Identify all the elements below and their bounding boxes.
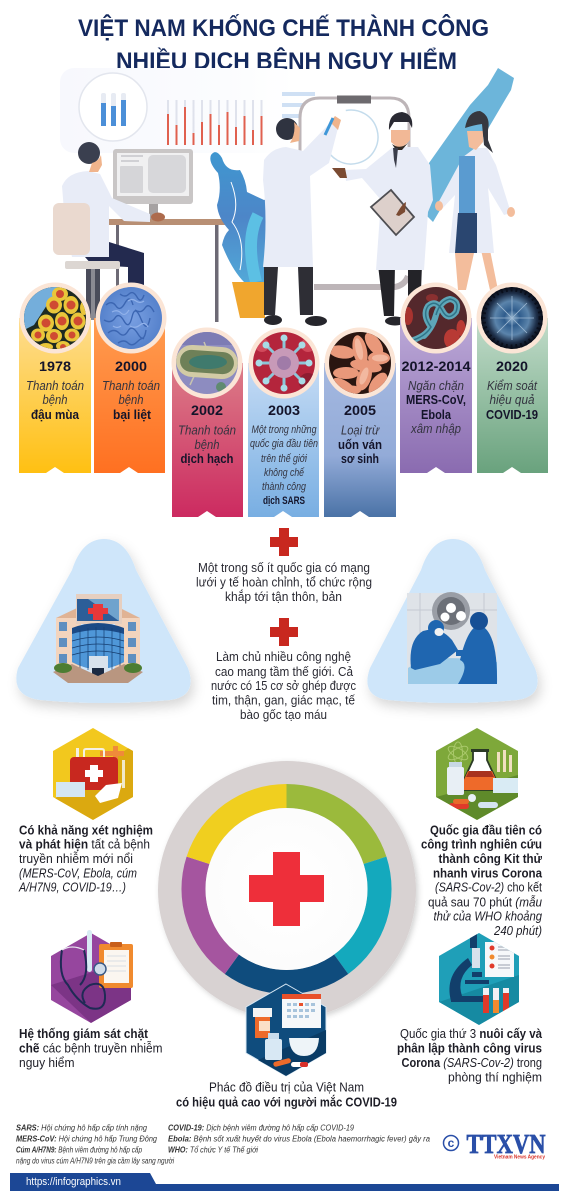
ribbon: 2012-2014	[400, 282, 472, 473]
text block: surveillance system: nguy hiểm	[19, 1055, 74, 1070]
ribbon: 2003: 2003	[268, 402, 300, 418]
doctor with clipboard	[332, 112, 433, 326]
ribbon: 2012-2014: Ebola	[421, 407, 452, 422]
ribbon: 2012-2014: Ngăn chặn	[408, 378, 464, 393]
ribbon: 1978: 1978	[39, 358, 71, 374]
icon: hospital building	[53, 594, 143, 683]
text block: glossary left: nặng do virus cúm A/H7N9 trên gia cầm lây sang người	[16, 1156, 174, 1166]
text block: healthcare network: khắp tới tận thôn, bản	[225, 589, 342, 604]
ribbon: 2003: thành công	[262, 481, 307, 493]
text block: rapid test kit: quả sau 70 phút (mẫu	[428, 894, 542, 910]
text block: virus culture: phân lập thành công virus	[397, 1040, 542, 1056]
text block: rapid test kit: Quốc gia đầu tiên có	[430, 822, 542, 838]
icon: SARS coronavirus	[253, 332, 317, 394]
icon: big red cross	[249, 852, 324, 926]
icon: microscope hexagon	[439, 930, 519, 1025]
text block: surveillance system: chẽ các bệnh truyền nhiễm	[19, 1040, 162, 1056]
ribbon: 1978	[19, 282, 91, 473]
ribbon: 2012-2014: xâm nhập	[410, 421, 461, 436]
text block: technology mastery: Làm chủ nhiều công nghệ	[216, 649, 351, 664]
text block: rapid test kit: nhanh virus Corona	[433, 866, 543, 880]
ribbon: 2000: Thanh toán	[102, 378, 160, 393]
text block: rapid test kit: 240 phút)	[493, 923, 542, 938]
text block: rapid test kit: công trình nghiên cứu	[421, 836, 542, 852]
text block: virus culture	[397, 1026, 543, 1084]
person at computer	[53, 142, 165, 320]
plant in pot	[210, 152, 270, 318]
text block: rapid test kit	[421, 822, 543, 938]
text block: rapid test kit: thử của WHO khoảng	[434, 908, 543, 924]
text block: treatment regimen: có hiệu quả cao với người mắc COVID-19	[176, 1094, 397, 1110]
ribbon: 2003: dịch SARS	[263, 495, 305, 507]
text block: glossary left: MERS-CoV: Hội chứng hô hấp Trung Đông	[16, 1134, 158, 1144]
table and computer	[107, 149, 236, 322]
footer bar	[10, 1173, 559, 1191]
ribbon: 2000	[94, 282, 166, 473]
ribbon: 2002: bệnh	[194, 437, 220, 452]
text block: healthcare network	[196, 560, 372, 604]
text block: technology mastery: tim, thận, gan, giác mạc, tế	[212, 692, 356, 708]
panel: timeline ribbons	[19, 282, 548, 517]
ribbon: 2020: 2020	[496, 358, 528, 374]
ribbon: 2005: sơ sinh	[341, 451, 379, 466]
icon: stethoscope hexagon	[51, 930, 133, 1023]
text block: testing capability: Có khả năng xét nghiệm	[19, 822, 153, 838]
text block: rapid test kit: (SARS-Cov-2) cho kết	[435, 880, 542, 894]
whiteboard	[300, 96, 409, 287]
text block: surveillance system: Hệ thống giám sát chặt	[19, 1026, 149, 1041]
ribbon: 2005: uốn ván	[338, 437, 382, 452]
ribbon: 2002	[172, 328, 243, 517]
ribbon: 2000: bệnh	[118, 392, 144, 407]
text block: glossary left: SARS: Hội chứng hô hấp cấp tính nặng	[16, 1124, 148, 1132]
text block: treatment regimen	[176, 1080, 397, 1110]
text block: technology mastery: nước có 15 cơ sở ghép được	[211, 678, 356, 693]
text block: healthcare network: lưới y tế hoàn chỉnh, tổ chức rộng	[196, 574, 372, 590]
icon: red cross 2	[270, 618, 298, 646]
ribbon: 1978: Thanh toán	[26, 378, 84, 393]
text block: testing capability	[18, 822, 153, 894]
ribbon: 2020	[476, 282, 548, 473]
text block: virus culture: Quốc gia thứ 3 nuôi cấy và	[400, 1026, 543, 1041]
logo: TTXVN: Vietnam News Agency	[494, 1154, 545, 1160]
icon: polio virus	[100, 287, 162, 349]
text block: testing capability: A/H7N9, COVID-19…)	[18, 880, 126, 894]
icon: ebola virus	[403, 287, 467, 349]
scientist writing on board	[263, 116, 341, 326]
ribbon: 2012-2014: 2012-2014	[402, 358, 471, 374]
ribbon: 2005: 2005	[344, 402, 376, 418]
ribbon: 2002: 2002	[191, 402, 223, 418]
text block: testing capability: (MERS-CoV, Ebola, cúm	[19, 866, 137, 880]
ribbon: 2020: Kiểm soát	[487, 378, 538, 393]
chart: red level bars	[167, 100, 262, 145]
logo: TTXVN: TTXVN	[466, 1129, 546, 1159]
blue brush stroke	[424, 68, 514, 222]
ribbon: 2003: quốc gia đầu tiên	[250, 438, 318, 450]
ribbon: 2000: bại liệt	[113, 407, 152, 422]
text block: technology mastery: bào gốc tạo máu	[240, 707, 327, 722]
logo: TTXVN: c	[448, 1136, 455, 1150]
icon: medicine hexagon	[246, 984, 326, 1076]
ribbon: 2000: 2000	[115, 358, 147, 374]
ribbon: 1978: đậu mùa	[31, 407, 80, 422]
icon: laboratory hexagon	[436, 728, 518, 820]
text block: glossary right: COVID-19: Dịch bệnh viêm đường hô hấp cấp COVID-19	[168, 1124, 354, 1132]
panel: surgery triangle	[367, 539, 538, 703]
icon: clipboard	[371, 190, 414, 235]
text block: treatment regimen: Phác đồ điều trị của Việt Nam	[209, 1080, 364, 1094]
title: NHIỀU DỊCH BỆNH NGUY HIỂM	[116, 47, 457, 75]
ribbon: 2003: không chế	[264, 467, 305, 479]
text block: technology mastery	[211, 649, 356, 722]
title	[78, 14, 489, 75]
ribbon: 2002: dịch hạch	[180, 451, 234, 466]
ribbon: 2003: Một trong những	[252, 424, 317, 436]
icon: plague bacterium	[175, 332, 239, 394]
ribbon: 2012-2014: MERS-CoV,	[406, 392, 466, 407]
ribbon: 2005: Loại trừ	[341, 422, 380, 438]
ribbon: 2020: hiệu quả	[490, 392, 534, 407]
logo: TTXVN	[444, 1129, 546, 1160]
text block: technology mastery: cao mang tầm thế giới. Cả	[215, 664, 354, 679]
icon: tetanus bacteria	[329, 332, 391, 394]
ribbon: 2003	[248, 328, 320, 517]
ribbon: 2005	[324, 328, 396, 517]
text block: healthcare network: Một trong số ít quốc gia có mạng	[198, 560, 370, 575]
icon: test tubes in circle	[79, 73, 147, 141]
pale bars	[282, 92, 315, 118]
icon: COVID-19 virus	[481, 287, 543, 349]
text block: virus culture: Corona (SARS-Cov-2) trong	[402, 1055, 542, 1070]
icon: first aid hexagon	[53, 728, 133, 820]
text block: testing capability: và phát hiện tất cả bệnh	[19, 836, 150, 852]
ribbon: 2002: Thanh toán	[178, 422, 236, 438]
text block: glossary left: Cúm A/H7N9: Bệnh viêm đường hô hấp cấp	[16, 1146, 142, 1154]
ribbon: 1978: bệnh	[42, 392, 68, 407]
text block: glossary right	[168, 1124, 431, 1154]
text block: testing capability: truyền nhiễm mới nổi	[19, 851, 133, 866]
text block: surveillance system	[19, 1026, 162, 1070]
text block: rapid test kit: thành công Kit thử	[438, 851, 543, 866]
ribbon: 2003: trên thế giới	[261, 453, 307, 465]
icon: red cross 1	[270, 528, 298, 556]
chart: central medical wheel	[158, 761, 416, 1019]
woman scientist	[435, 111, 515, 290]
title: VIỆT NAM KHỐNG CHẾ THÀNH CÔNG	[78, 14, 489, 42]
panel: hospital triangle	[16, 539, 191, 703]
text block: glossary left	[16, 1124, 174, 1166]
footer bar: https://infographics.vn	[26, 1176, 121, 1188]
text block: glossary right: WHO: Tổ chức Y tế Thế giới	[168, 1146, 258, 1154]
ribbon: 2020: COVID-19	[486, 407, 538, 422]
text block: virus culture: phòng thí nghiệm	[448, 1070, 542, 1084]
icon: surgeons in operating room	[407, 592, 497, 684]
illustration: scientists in laboratory	[53, 68, 515, 326]
text block: glossary right: Ebola: Bệnh sốt xuất huyết do virus Ebola (Ebola haemorrhagic fever) gây ra	[168, 1134, 431, 1144]
icon: smallpox virus	[24, 287, 88, 351]
